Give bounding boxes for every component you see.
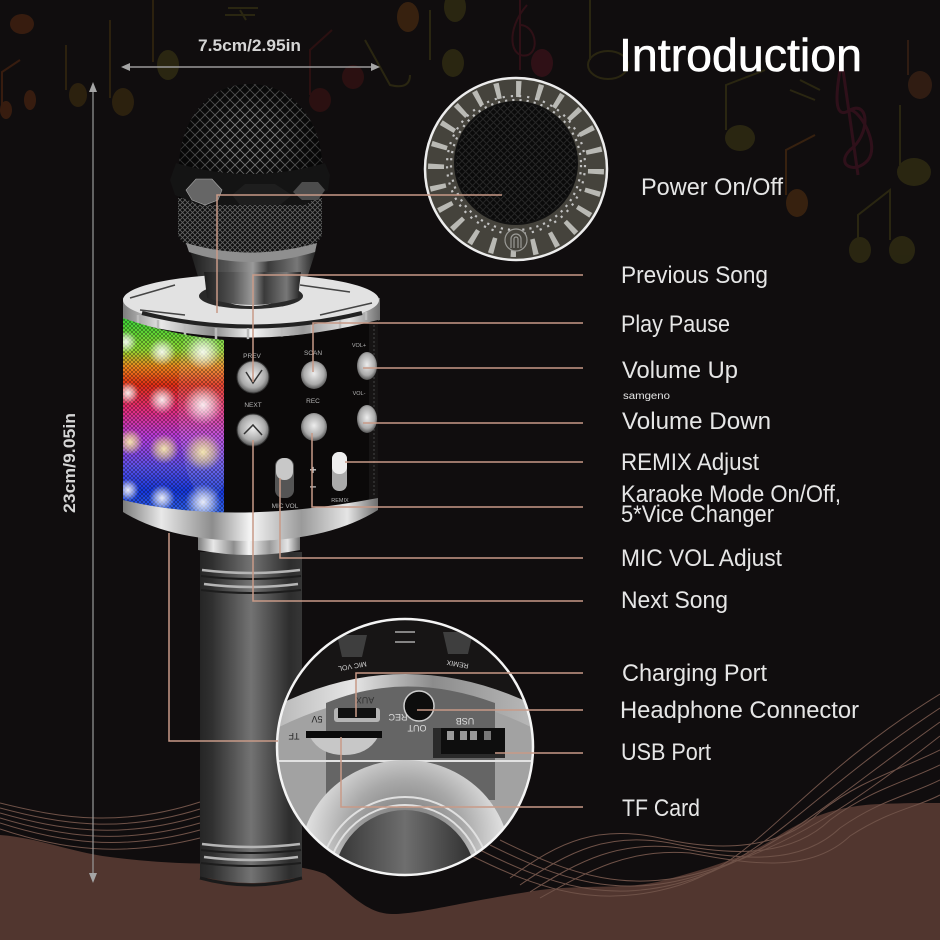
leader: mic vol: [280, 478, 583, 558]
note: centre group: [225, 0, 466, 112]
top knobs and markings: [337, 632, 473, 657]
TF slot: [306, 731, 382, 755]
grey port panel: [278, 708, 532, 826]
button labels: VOL+: [352, 343, 366, 349]
leader: karaoke: [312, 433, 583, 507]
button: next: [237, 414, 269, 446]
label: headphone: Headphone Connector: [620, 697, 859, 724]
leader: play pause: [313, 323, 583, 372]
button labels: [243, 343, 366, 510]
body bottom rim: [123, 498, 378, 541]
leader: detail circle: [169, 533, 278, 741]
detail circle: top view: [425, 78, 607, 260]
power icon: [505, 229, 527, 251]
leader: power: [217, 195, 502, 313]
button labels: +: [309, 463, 317, 477]
note: treble clef top: [512, 0, 628, 79]
headphone jack: [404, 691, 434, 721]
brown wave ground: [0, 803, 940, 940]
flipped port labels: REC: [388, 712, 408, 722]
label: previous song: Previous Song: [621, 262, 768, 289]
leader: tf card: [341, 737, 583, 807]
ring: [425, 78, 607, 260]
button labels: REMIX: [331, 498, 349, 504]
slider: mic vol: [275, 458, 294, 498]
leader: headphone: [417, 709, 583, 711]
title: Introduction: [619, 29, 862, 81]
leader: next song: [253, 440, 583, 601]
flipped port labels: AUX: [356, 695, 374, 705]
label: mic vol: MIC VOL Adjust: [621, 545, 782, 572]
note: left group: [0, 0, 179, 119]
flipped port labels: TF: [288, 731, 300, 741]
neck base overlay: [204, 272, 301, 305]
button: volume down: [357, 405, 377, 433]
ring dots: [447, 96, 585, 234]
button labels: –: [310, 479, 317, 493]
label: power: Power On/Off: [641, 174, 783, 201]
LED light panel: [123, 318, 224, 512]
dark port inset: [326, 686, 495, 800]
button labels: MIC VOL: [272, 503, 299, 510]
flipped port labels: USB: [456, 716, 474, 726]
silver rim arc: [280, 674, 530, 727]
flipped port labels: [288, 658, 474, 741]
label: play pause: Play Pause: [621, 311, 730, 338]
leader: charging port: [356, 673, 583, 717]
mic faceted band: [170, 163, 330, 205]
music notes background: [0, 0, 932, 264]
mic body top plate: [123, 274, 380, 342]
chrome dome: [306, 760, 504, 855]
mic neck: [190, 250, 316, 300]
USB port: [433, 728, 505, 758]
mic head mesh: [178, 84, 323, 262]
body front panel: [224, 320, 378, 518]
mic handle: [200, 552, 302, 885]
label: karaoke: Karaoke Mode On/Off,: [621, 481, 841, 508]
button: scan: [301, 361, 327, 389]
flipped port labels: REMIX: [446, 658, 469, 669]
flipped port labels: 5V: [311, 714, 323, 724]
detail circle: bottom ports: [276, 618, 534, 876]
leader: usb: [495, 752, 583, 754]
dimension label: height: 23cm/9.05in: [60, 413, 79, 513]
button labels: PREV: [243, 353, 262, 360]
label: usb: USB Port: [621, 739, 711, 766]
flipped port labels: MIC VOL: [337, 660, 367, 671]
leader: remix: [345, 461, 583, 463]
mic lower collar: [198, 530, 300, 555]
button labels: REC: [306, 398, 320, 405]
microphone: [115, 84, 380, 885]
button: volume up: [357, 352, 377, 380]
label: tf card: TF Card: [622, 795, 700, 822]
note: treble clef right: [837, 70, 872, 175]
label: samgeno: samgeno: [623, 391, 670, 402]
charging port: [334, 708, 380, 722]
feature labels: [620, 174, 859, 822]
leader: volume up: [363, 367, 583, 369]
body right edge: [369, 320, 378, 502]
slider: remix: [332, 452, 347, 491]
button: prev: [237, 361, 269, 393]
label: volume down: Volume Down: [622, 408, 771, 435]
dimension label: width: 7.5cm/2.95in: [198, 36, 301, 55]
label: volume up: Volume Up: [622, 357, 738, 384]
button: rec: [301, 413, 327, 441]
button labels: SCAN: [304, 350, 322, 357]
dome inner: [339, 810, 471, 874]
dimension arrow: height: [89, 82, 97, 883]
leader: volume down: [363, 422, 583, 424]
label: remix: REMIX Adjust: [621, 449, 759, 476]
divider: [277, 760, 533, 762]
mesh grille: [455, 102, 577, 224]
leader lines: [169, 195, 583, 807]
ring bars: [436, 89, 596, 249]
button labels: VOL-: [353, 391, 366, 397]
label: vice changer: 5*Vice Changer: [621, 501, 774, 528]
button labels: NEXT: [244, 402, 262, 409]
flipped port labels: OUT: [407, 723, 426, 733]
label: next song: Next Song: [621, 587, 728, 614]
wave lines: [0, 694, 940, 898]
leader: previous song: [253, 275, 583, 382]
label: charging port: Charging Port: [622, 660, 767, 687]
note: right group: [725, 40, 932, 264]
dimension arrow: width: [121, 63, 380, 71]
